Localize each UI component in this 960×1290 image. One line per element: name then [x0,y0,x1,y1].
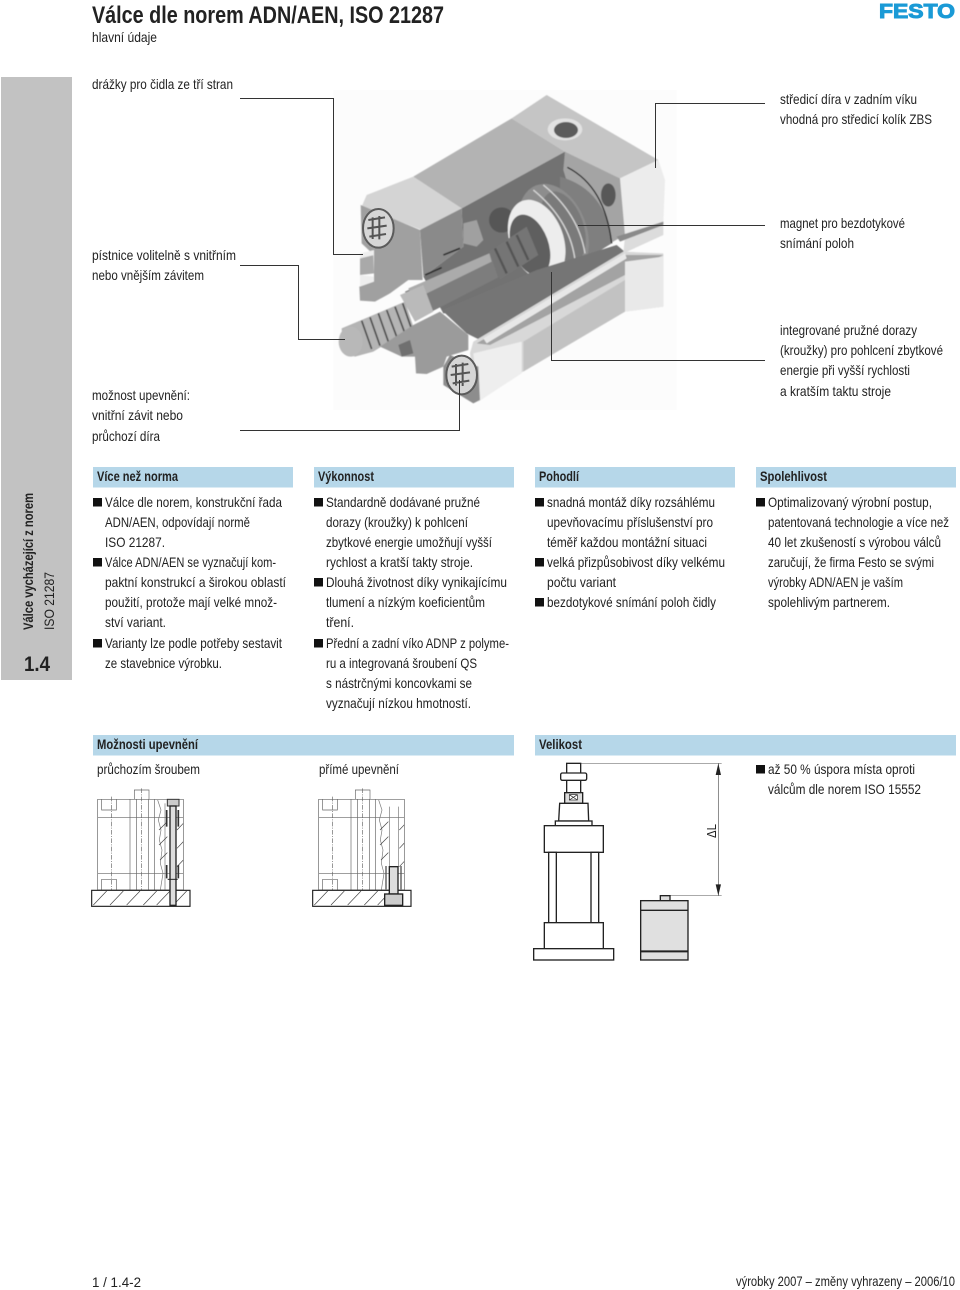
panel: Pohodlí: snadná montáž díky rozsáhlému [547,494,715,510]
subtitle: hlavní údaje [92,29,157,45]
panel: Výkonnost: Dlouhá životnost díky vynikajícímu [326,574,507,590]
panel: Více než norma [93,467,293,671]
side tab number: 1.4 [24,653,50,676]
cylinder cutaway illustration [333,90,677,410]
panel: Výkonnost: tlumení a nízkým koeficientům [326,594,485,610]
callout: piston rod: pístnice volitelně s vnitřním [92,247,236,263]
panel: Více než norma: Válce dle norem, konstrukční řada [105,494,282,510]
callout: cushioning: a kratším taktu stroje [780,383,891,399]
holes [548,118,582,140]
callout: cushioning: energie při vyšší rychlosti [780,362,910,378]
panel: Spolehlivost: Spolehlivost [760,468,827,484]
drawing: through-bolt mounting [92,788,190,906]
panel: Výkonnost: Přední a zadní víko ADNP z polyme- [326,635,509,651]
bullet text: space saving [756,761,921,797]
callout: mounting: možnost upevnění: [92,387,190,403]
lower section [380,312,468,374]
panel: Pohodlí: upevňovacímu příslušenství pro [547,514,713,530]
panel: Výkonnost: ru a integrovaná šroubení QS [326,655,477,671]
panel: grey side tab [1,77,72,680]
panel: Výkonnost [314,467,514,711]
panel: Výkonnost: dorazy (kroužky) k pohlcení [326,514,468,530]
panel: Pohodlí: Pohodlí [539,468,580,484]
drawing: direct mounting [313,788,411,906]
thread [342,302,413,357]
panel: Pohodlí: velká přizpůsobivost díky velkému [547,554,725,570]
panel: Více než norma: ISO 21287. [105,534,165,550]
callout: centring hole [780,91,932,127]
callout: mounting: vnitřní závit nebo [92,407,183,423]
panel: Více než norma: Více než norma [97,468,178,484]
panel: Pohodlí: počtu variant [547,574,616,590]
panel: Spolehlivost [756,467,956,610]
panel: Spolehlivost: spolehlivým partnerem. [768,594,890,610]
panel: Více než norma: Válce ADN/AEN se vyznačují kom- [105,554,276,570]
callout: magnet: snímání poloh [780,235,854,251]
panel: Více než norma: použití, protože mají velké množ- [105,594,277,610]
top surfaces [362,177,462,230]
logo: FESTO: FESTO [879,1,955,23]
panel: Více než norma: ADN/AEN, odpovídají normě [105,514,250,530]
dimension label: ΔL [704,824,719,838]
panel: Výkonnost: Standardně dodávané pružné [326,494,480,510]
callout: centring hole: vhodná pro středicí kolík ZBS [780,111,932,127]
panel: Více než norma: ze stavebnice výrobku. [105,655,222,671]
callout: mounting [92,387,190,444]
panel: Výkonnost: vyznačují nízkou hmotností. [326,695,471,711]
interior [423,152,590,313]
panel: Výkonnost: zbytkové energie umožňují vyšší [326,534,492,550]
callout: piston rod [92,247,236,283]
title: Válce dle norem ADN/AEN, ISO 21287 [92,2,444,29]
panel: Pohodlí: bezdotykové snímání poloh čidly [547,594,716,610]
bullet text: space saving: až 50 % úspora místa oproti [768,761,915,777]
leader lines [240,98,765,430]
callout: piston rod: nebo vnějším závitem [92,267,204,283]
callout: sensor slots: drážky pro čidla ze tří stran [92,76,233,92]
rod [488,227,538,280]
side tab chapter title: Válce vycházející z norem [20,493,36,630]
panel: Spolehlivost: Optimalizovaný výrobní postup, [768,494,932,510]
callout: magnet [780,215,905,251]
drawing: size comparison [534,763,722,960]
panel: Možnosti upevnění: Možnosti upevnění [97,736,199,752]
label: direct mounting: přímé upevnění [319,761,399,777]
panel: Velikost: Velikost [539,736,582,752]
panel: Výkonnost: s nástrčnými koncovkami se [326,675,472,691]
footer: page number: 1 / 1.4-2 [92,1274,141,1290]
panel: Více než norma: Varianty lze podle potřeby sestavit [105,635,282,651]
callout: magnet: magnet pro bezdotykové [780,215,905,231]
piston [560,177,612,257]
bullet text: space saving: válcům dle norem ISO 15552 [768,781,921,797]
panel: Více než norma: ství variant. [105,614,166,630]
callout: cushioning [780,322,943,399]
callout: mounting: průchozí díra [92,428,160,444]
panel: Možnosti upevnění [92,735,514,906]
panel: Pohodlí: téměř každou montážní situaci [547,534,707,550]
panel: Výkonnost: tření. [326,614,354,630]
callout: cushioning: integrované pružné dorazy [780,322,917,338]
callout: centring hole: středicí díra v zadním víku [780,91,917,107]
panel: Výkonnost: Výkonnost [318,468,374,484]
panel: Spolehlivost: výrobky ADN/AEN je vaším [768,574,903,590]
label: through bolt: průchozím šroubem [97,761,200,777]
side tab standard: ISO 21287 [41,572,57,630]
screws [363,209,477,394]
panel: Výkonnost: rychlost a kratší takty stroje. [326,554,473,570]
panel: Velikost [534,735,956,960]
panel: Více než norma: paktní konstrukcí a širokou oblastí [105,574,286,590]
panel: Pohodlí [535,467,735,610]
